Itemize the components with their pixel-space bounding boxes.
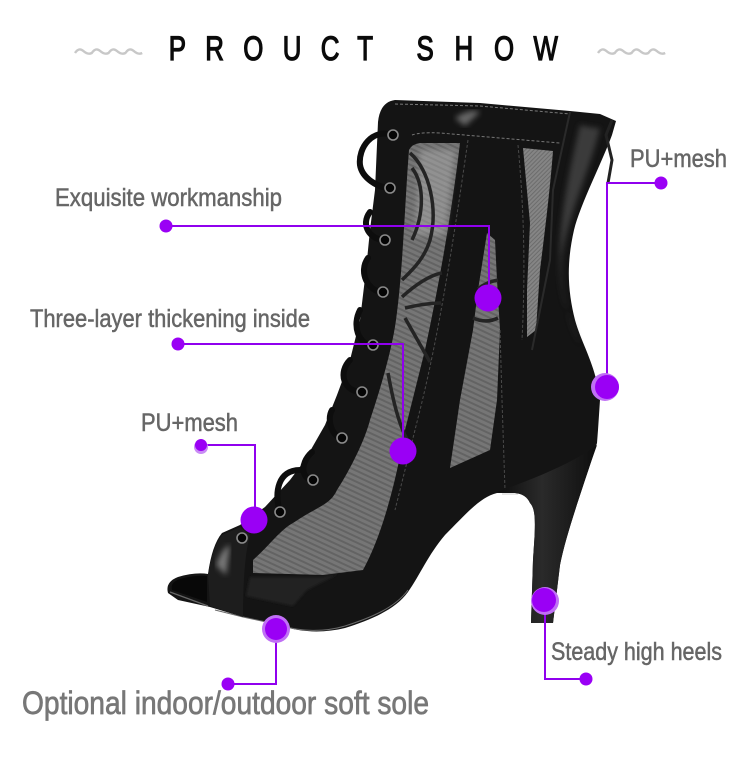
label: PU+mesh [630,145,727,173]
title [75,31,665,68]
heel [497,445,597,623]
toe insole [172,576,207,602]
boot silhouette [167,100,616,631]
toe highlight [170,592,208,606]
end dot halo [591,373,619,401]
slit mesh panel [523,148,553,337]
label: Optional indoor/outdoor soft sole [22,685,429,721]
laces [277,134,393,512]
main mesh panel [253,143,460,575]
end dot halo [262,615,290,643]
start dot [195,439,207,451]
callout: three-layer thickening [30,305,416,464]
leader line [201,445,255,520]
mesh swirl pattern [388,153,498,445]
label: Steady high heels [551,638,722,666]
label: Three-layer thickening inside [30,305,310,333]
leader line [607,183,661,387]
left squiggle [75,49,142,54]
label: Exquisite workmanship [55,184,282,212]
callout: PU+mesh right [591,145,727,401]
back mesh panel [450,233,500,468]
strap stitching [395,140,524,510]
collar stitching [395,104,570,143]
start dot [654,176,668,190]
zipper [606,120,612,183]
vamp highlight [216,545,230,575]
end dot [390,438,416,464]
leader line [178,344,403,451]
title text: PROUCTSHOW [169,31,558,68]
start dot [532,588,556,612]
label: PU+mesh [141,409,238,437]
start dot halo [194,440,208,454]
boot illustration [167,100,616,631]
leather back panel highlight [560,125,600,345]
callout: steady high heels [531,587,722,686]
start dot [160,220,172,232]
end dot [580,672,592,686]
start dot [172,338,184,350]
mesh lower shadow [246,574,338,606]
callout: soft sole [22,615,429,721]
start dot halo [531,587,559,615]
right squiggle [598,49,665,54]
end dot [265,618,287,640]
callout: PU+mesh left [141,409,268,534]
sole highlight under body [502,493,518,495]
leader line [545,600,586,679]
sole edge highlight [215,590,408,630]
leather vamp strip [208,527,250,617]
leader line [166,226,489,298]
mesh highlight [415,150,455,235]
eyelets [237,130,398,543]
leader line [228,629,276,684]
callout: exquisite workmanship [55,184,502,312]
collar highlight [455,111,480,126]
end dot [474,284,502,312]
end dot [595,375,619,399]
back seam [532,112,570,350]
start dot [222,678,234,690]
end dot [240,506,268,534]
